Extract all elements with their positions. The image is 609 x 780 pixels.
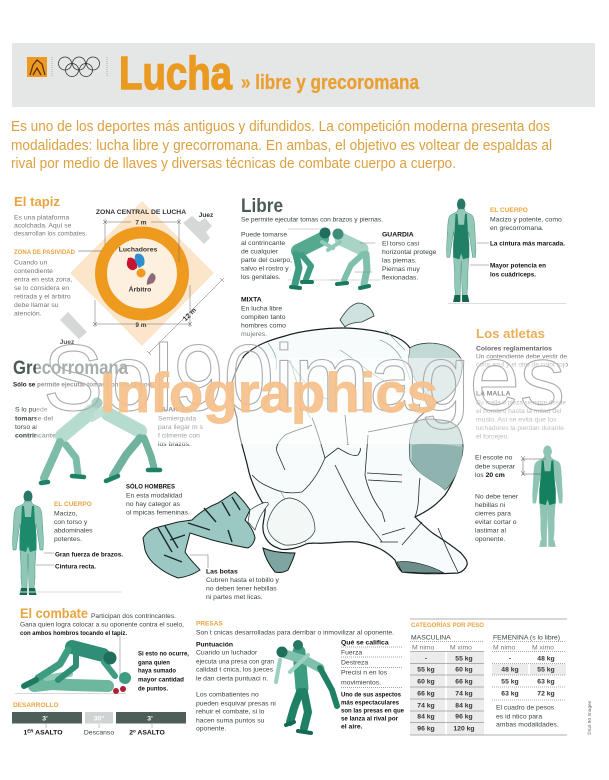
la malla: el hombro hasta la mitad del — [476, 408, 562, 415]
guardia grecorromana text: los brazos. — [158, 441, 191, 448]
intro text — [11, 119, 552, 172]
que se califica list: movimientos. — [341, 680, 381, 686]
ear detail — [340, 303, 374, 327]
table: femenina: 72 kg — [537, 690, 555, 698]
guardia text: las piernas. — [382, 258, 417, 264]
puntuacion text — [196, 642, 276, 732]
timeline bars: 3' — [42, 716, 48, 722]
mixta text: En lucha libre — [241, 306, 282, 312]
credit: ©Sol 90 Images — [586, 700, 593, 735]
panel: presas — [196, 620, 404, 733]
tapiz description: Es una plataforma — [14, 214, 69, 222]
zona de pasividad text: Cuando un — [14, 260, 47, 266]
white haze under watermark — [36, 358, 566, 444]
table: masculina: 74 kg — [455, 690, 473, 698]
libre wrestlers illustration — [288, 228, 380, 288]
combate callout: de puntos. — [138, 686, 168, 692]
libre left text: parte del cuerpo, — [241, 257, 292, 264]
table: femenina: FEMENINA (s lo libre) — [493, 634, 560, 642]
heading: presas: PRESAS — [196, 620, 223, 628]
zona de pasividad text: entra en esta zona, — [14, 276, 72, 284]
solo hombres text — [126, 482, 190, 516]
grecorromana el cuerpo text: Cintura recta. — [55, 564, 96, 570]
table: femenina: M nimo — [493, 644, 516, 652]
panel: categorias por peso — [410, 619, 567, 735]
mixta text — [241, 296, 286, 338]
grecorromana el cuerpo text: EL CUERPO — [54, 501, 92, 508]
icon: juez top — [183, 216, 212, 244]
las botas text: no deben tener hebillas — [206, 586, 277, 592]
libre el cuerpo text: en grecorromana. — [490, 225, 544, 232]
table note: es id ntico para — [496, 714, 542, 720]
table: femenina: 63 kg — [537, 678, 555, 686]
main body outline — [232, 328, 467, 574]
combate description: Gana quien logra colocar a su oponente contra el suelo, — [20, 622, 184, 628]
icon: wrestling pictogram — [27, 57, 47, 77]
guardia grecorromana text: para llegar m s — [158, 424, 204, 431]
combate callout: mayor cantidad — [138, 676, 184, 684]
hebillas text: lastimar al — [475, 528, 506, 534]
solo hombres text: ol mpicas femeninas. — [126, 510, 190, 516]
intro text: modalidades: lucha libre y grecorromana. En ambas, el objetivo es voltear de espaldas al — [11, 138, 552, 154]
libre left text — [241, 232, 292, 281]
timeline bars: 1 — [24, 730, 27, 736]
boot center leg — [248, 502, 268, 530]
table note: El cuadro de pesos — [496, 704, 555, 712]
libre el cuerpo text: Macizo y potente, como — [490, 216, 562, 224]
solo hombres text: SÓLO HOMBRES — [126, 482, 175, 490]
singlet figure — [521, 445, 563, 547]
table note: ambas modalidades. — [496, 722, 559, 728]
panel: el combate — [12, 605, 189, 736]
table: masculina: M nimo — [412, 644, 435, 652]
timeline bars: o — [133, 728, 136, 734]
las botas text — [190, 555, 280, 601]
puntuacion text: Cuando un luchador — [196, 650, 258, 656]
hebillas text: hebillas ni — [475, 502, 506, 509]
libre el cuerpo text: EL CUERPO — [490, 207, 528, 214]
guardia grecorromana text: GUARDIA — [158, 406, 190, 414]
mat diagram — [60, 201, 224, 355]
combate description — [20, 613, 184, 637]
que se califica list: se lanza al rival por — [341, 716, 398, 722]
head patches — [408, 343, 462, 402]
puntuacion text: le dan cierta puntuaci n. — [196, 676, 268, 682]
combate callout: Si esto no ocurre, — [138, 650, 189, 658]
table: masculina: 55 kg — [455, 656, 473, 662]
table: femenina: 55 kg — [537, 666, 555, 674]
mat labels: Luchadores — [119, 246, 157, 254]
mixta text: hombres como — [241, 322, 286, 330]
combate callout — [138, 650, 189, 692]
la malla: Su malla o pieza siempre desde — [476, 400, 566, 406]
colores reglamentarios: color azul y el otro de color rojo — [476, 362, 568, 368]
boot lower — [263, 548, 295, 573]
libre subhead: Se permite ejecutar tomas con brazos y piernas. — [241, 216, 383, 224]
heading: el combate: El combate — [20, 605, 88, 621]
libre left text: Puede tomarse — [241, 232, 287, 238]
heading: libre: Libre — [241, 196, 283, 217]
mat labels: 12 m — [182, 307, 198, 323]
puntuacion text: oponente. — [196, 726, 226, 732]
hebillas text: evitar cortar o — [475, 519, 517, 526]
timeline bars: Descanso — [84, 730, 114, 736]
guardia text: Piernas muy — [382, 266, 420, 273]
mat labels: ZONA CENTRAL DE LUCHA — [96, 209, 186, 216]
que se califica list — [341, 640, 404, 730]
escote text — [475, 454, 516, 479]
libre el cuerpo text: los cuádriceps. — [490, 272, 536, 278]
heading: los atletas: Los atletas — [476, 326, 545, 341]
table: masculina: 66 kg — [455, 678, 473, 686]
puntuacion text: Puntuación — [196, 642, 233, 648]
heading: grecorromana: Grecorromana — [13, 358, 128, 379]
guardia grecorromana text: Semierguida — [158, 416, 196, 422]
table: masculina: 74 kg — [417, 702, 435, 710]
table: masculina: - — [425, 656, 427, 662]
panel: los atletas — [475, 326, 568, 547]
grecorromana left text: S lo puede — [15, 406, 48, 414]
mat labels: Juez — [199, 212, 214, 219]
table: masculina: 120 kg — [453, 726, 475, 732]
zona de pasividad text: se lo considera en — [14, 285, 69, 292]
table: masculina: 84 kg — [417, 714, 435, 720]
combate wrestlers illustration — [15, 636, 131, 694]
tapiz description — [14, 214, 87, 238]
table: masculina: 60 kg — [417, 678, 435, 686]
libre el cuerpo text: La cintura más marcada. — [490, 240, 565, 248]
table: femenina: - — [509, 656, 511, 662]
grecorromana el cuerpo text: Gran fuerza de brazos. — [55, 552, 123, 558]
grecorromana left text: contrincante. — [15, 432, 58, 440]
intro text: rival por medio de llaves y diversas técnicas de combate cuerpo a cuerpo. — [11, 156, 456, 172]
grecorromana athlete figure — [12, 490, 122, 595]
guardia grecorromana text — [158, 406, 204, 448]
libre left text: salvo el rostro y — [241, 266, 289, 272]
mat labels — [60, 209, 214, 346]
mixta text: mujeres. — [241, 331, 267, 338]
grecorromana el cuerpo text: potentes. — [54, 536, 82, 543]
libre left text: de cualquier — [241, 248, 279, 256]
mat labels: Juez — [60, 339, 75, 346]
combate callout: gana quien — [138, 660, 170, 666]
mat labels: 9 m — [135, 322, 147, 329]
las botas text: Las botas — [206, 568, 238, 576]
knee detail — [267, 498, 315, 545]
timeline bars: ASALTO — [34, 730, 62, 736]
zona de pasividad text: contendiente — [14, 268, 53, 275]
zona de pasividad text: atención. — [14, 310, 42, 318]
puntuacion text: calidad t cnica, los jueces — [196, 666, 274, 674]
combate description: Participan dos contrincantes. — [91, 613, 176, 620]
mixta text: MIXTA — [241, 296, 262, 304]
timeline bars: ASALTO — [136, 730, 165, 736]
table: masculina — [410, 634, 567, 735]
la malla: LA MALLA — [476, 390, 511, 398]
mat labels: Árbitro — [129, 284, 151, 294]
table: masculina: 55 kg — [417, 666, 435, 674]
guardia text: horizontal protege — [382, 249, 437, 256]
que se califica list: Precisi n en los — [341, 670, 388, 676]
timeline bars: 3' — [147, 716, 153, 722]
que se califica list: Uno de sus aspectos — [341, 692, 401, 698]
table: masculina: M ximo — [450, 644, 472, 652]
presas description: Son t cnicas desarrolladas para derribar o inmovilizar al oponente. — [196, 630, 394, 636]
grecorromana el cuerpo text: Macizo, — [54, 510, 78, 518]
grecorromana left text — [15, 406, 58, 440]
table note — [496, 704, 559, 728]
grecorromana wrestlers illustration — [41, 398, 160, 483]
guardia grecorromana text: f cilmente con — [158, 432, 200, 440]
table: femenina: 55 kg — [501, 678, 519, 686]
boot left — [143, 492, 255, 578]
icon: juez bottom — [60, 312, 87, 339]
table: femenina: 63 kg — [501, 690, 519, 698]
watermark: Infographics: Infographics — [100, 361, 438, 424]
table: femenina: M ximo — [532, 644, 554, 652]
table: masculina: MASCULINA — [411, 634, 451, 642]
hebillas text: No debe tener — [475, 494, 519, 500]
boot right — [397, 562, 444, 573]
heading: zona de pasividad: ZONA DE PASIVIDAD — [14, 249, 75, 256]
grecorromana subhead: Sólo se permite ejecutar tomas con los brazos. — [13, 382, 153, 388]
central wrestlers illustration — [143, 303, 467, 578]
zona de pasividad text — [14, 260, 72, 318]
timeline bars: 2 — [129, 730, 133, 736]
zona de pasividad text: debe llamar su — [14, 302, 59, 309]
que se califica list: el aire. — [341, 724, 363, 730]
puntuacion text: hacen suma puntos su — [196, 718, 265, 724]
panel: libre — [241, 196, 566, 338]
solo hombres text: En esta modalidad — [126, 492, 183, 500]
combate callout: haya sumado — [138, 668, 176, 674]
table: masculina: 66 kg — [417, 690, 435, 698]
table: masculina: 84 kg — [455, 702, 473, 710]
zona de pasividad text: retirada y el árbitro — [14, 294, 71, 300]
libre el cuerpo text: Mayor potencia en — [490, 262, 546, 270]
grecorromana el cuerpo text — [54, 501, 123, 570]
subtitle: » libre y grecoromana — [241, 72, 420, 94]
title: Lucha — [119, 47, 232, 99]
puntuacion text: ejecuta una presa con gran — [196, 658, 274, 666]
que se califica list: más espectaculares — [341, 700, 399, 706]
las botas text: Cubren hasta el tobillo y — [206, 577, 280, 584]
mixta text: compiten tanto — [241, 314, 286, 321]
grecorromana el cuerpo text: abdominales — [54, 528, 93, 534]
hebillas text — [475, 494, 519, 543]
libre left text: al contrincante — [241, 240, 285, 247]
table: femenina — [492, 634, 566, 700]
icon: olympic rings — [52, 57, 107, 77]
colores reglamentarios: Colores reglamentarios — [476, 346, 552, 352]
luchadores markers — [127, 254, 156, 285]
watermark: Sol90images: Sol90images — [43, 325, 565, 430]
que se califica list: son las presas en que — [341, 708, 404, 714]
hebillas text: cierres para — [475, 510, 511, 518]
la malla — [476, 390, 566, 440]
libre el cuerpo text — [490, 207, 565, 278]
heading: desarrollo: DESARROLLO — [13, 702, 58, 709]
la malla: muslo. Así se evita que los — [476, 416, 557, 424]
solo hombres text: no hay categor as — [126, 501, 181, 508]
tapiz description: acolchada. Aquí se — [14, 222, 72, 230]
header band — [12, 43, 595, 107]
escote text: El escote no — [475, 454, 513, 462]
table: femenina: 48 kg — [501, 666, 519, 674]
guardia text: El torso casi — [382, 240, 420, 248]
hebillas text: oponente. — [475, 536, 505, 543]
timeline bars: 30" — [94, 716, 104, 722]
colores reglamentarios: Un contendiente debe vestir de — [476, 354, 567, 360]
intro text: Es uno de los deportes más antiguos y difundidos. La competición moderna presenta dos — [11, 119, 550, 135]
puntuacion text: Los combatientes no — [196, 692, 259, 698]
que se califica list: Qué se califica — [341, 640, 389, 646]
escote text: los 20 cm — [475, 472, 505, 479]
timeline bars: ER — [27, 728, 34, 734]
panel: el tapiz — [14, 194, 224, 355]
guardia text: GUARDIA — [382, 232, 414, 238]
table: femenina: 48 kg — [537, 656, 555, 662]
puntuacion text: pueden esquivar presas ni — [196, 700, 276, 708]
presas wrestlers illustration — [276, 640, 337, 733]
libre left text: los genitales. — [241, 274, 281, 281]
grecorromana left text: tomarse del — [15, 416, 53, 422]
que se califica list: Fuerza — [341, 650, 362, 656]
colores reglamentarios — [476, 346, 568, 368]
table: masculina: 96 kg — [455, 714, 473, 720]
la malla: luchadores la pierdan durante — [476, 425, 564, 432]
grecorromana left text: torso al — [15, 424, 38, 431]
timeline bars — [12, 712, 186, 736]
inner anatomy lines — [252, 415, 458, 572]
escote text: debe superar — [475, 464, 516, 470]
table: masculina: 60 kg — [455, 666, 473, 674]
panel: grecorromana — [12, 358, 280, 601]
combate description: con ambos hombros tocando el tapiz. — [20, 630, 127, 637]
mat labels: 7 m — [135, 220, 147, 226]
guardia text: flexionadas. — [382, 274, 418, 282]
libre athlete figure — [446, 198, 566, 304]
heading: el tapiz: El tapiz — [14, 194, 60, 209]
table: masculina: 96 kg — [417, 726, 435, 732]
guardia text — [382, 232, 437, 282]
grecorromana el cuerpo text: con torso y — [54, 519, 88, 526]
las botas text: ni partes met licas. — [206, 594, 263, 601]
tapiz description: desarrollan los combates. — [14, 230, 87, 238]
heading: categorias: CATEGORÍAS POR PESO — [411, 620, 484, 629]
puntuacion text: rehuir el combate, si lo — [196, 708, 265, 716]
que se califica list: Destreza — [341, 660, 368, 666]
la malla: el forcejeo. — [476, 434, 509, 440]
